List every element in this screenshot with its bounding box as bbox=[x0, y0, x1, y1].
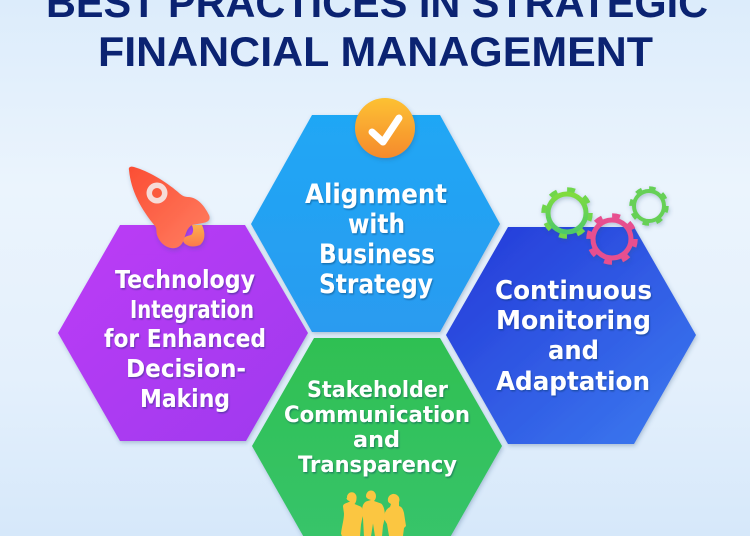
icon: rocket bbox=[129, 167, 210, 248]
icon: checkmark badge bbox=[355, 98, 415, 158]
icon: people bbox=[341, 491, 406, 536]
technology text: for Enhanced bbox=[104, 324, 266, 353]
technology text: Technology bbox=[115, 265, 255, 294]
title: FINANCIAL MANAGEMENT bbox=[98, 28, 653, 75]
icon: gears bbox=[544, 188, 667, 262]
alignment text: Strategy bbox=[319, 269, 433, 300]
title bbox=[46, 0, 708, 75]
continuous monitoring text bbox=[495, 276, 652, 397]
continuous monitoring text: Adaptation bbox=[496, 367, 650, 397]
left person bbox=[341, 492, 363, 536]
stakeholder text: Communication bbox=[284, 403, 470, 428]
technology text: Making bbox=[140, 384, 230, 413]
right person bbox=[384, 494, 406, 536]
panel: technology integration bbox=[58, 225, 308, 441]
technology text: Integration bbox=[130, 295, 254, 324]
alignment text: with bbox=[348, 209, 405, 240]
stakeholder text: Transparency bbox=[298, 453, 457, 478]
large green gear bbox=[544, 190, 590, 236]
alignment text: Alignment bbox=[305, 179, 447, 210]
continuous monitoring text: Continuous bbox=[495, 276, 652, 306]
panel: stakeholder communication bbox=[252, 338, 502, 536]
alignment text bbox=[305, 179, 447, 300]
middle person bbox=[362, 491, 385, 536]
technology text bbox=[104, 265, 266, 413]
continuous monitoring text: and bbox=[548, 336, 599, 366]
pink gear bbox=[588, 216, 636, 262]
panel: continuous monitoring bbox=[446, 227, 696, 444]
alignment text: Business bbox=[319, 239, 435, 270]
small green gear bbox=[631, 188, 667, 224]
stakeholder text: and bbox=[353, 428, 400, 453]
stakeholder text bbox=[284, 378, 470, 478]
panel: alignment with business strategy bbox=[251, 115, 500, 332]
technology text: Decision- bbox=[126, 354, 246, 383]
continuous monitoring text: Monitoring bbox=[496, 306, 651, 336]
stakeholder text: Stakeholder bbox=[307, 378, 448, 403]
